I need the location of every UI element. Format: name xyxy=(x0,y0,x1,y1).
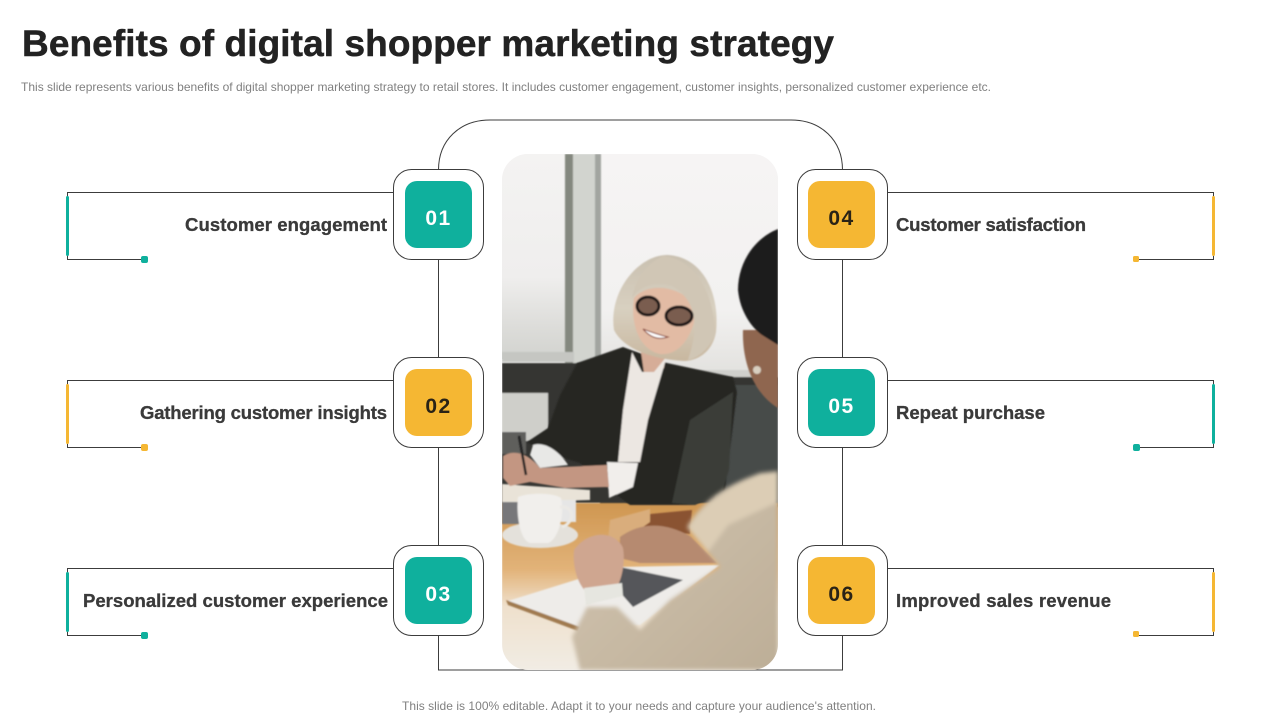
item 02: gathering customer insights xyxy=(66,358,484,451)
item 01: customer engagement xyxy=(66,170,484,263)
item 05: repeat purchase xyxy=(798,358,1215,451)
badge 02: 02 xyxy=(425,395,452,418)
badge 05: 05 xyxy=(828,395,855,418)
notebook and writing hand xyxy=(502,484,590,502)
badge 05 xyxy=(798,358,888,448)
label 05: Repeat purchase xyxy=(896,402,1045,423)
dot 06 xyxy=(1133,631,1139,637)
subtitle description: This slide represents various benefits of digital shopper marketing strategy to retail stores. It includes customer engagement, customer insights, personalized customer experience etc. xyxy=(21,80,991,94)
jacket xyxy=(527,347,737,505)
blouse xyxy=(618,352,667,462)
dot 03 xyxy=(141,632,148,639)
badge 04: 04 xyxy=(828,207,855,230)
accent bar 03 xyxy=(66,572,69,632)
hair xyxy=(613,255,717,361)
badge 02 xyxy=(394,358,484,448)
photo: two women meeting at a table xyxy=(502,154,778,670)
item 04: customer satisfaction xyxy=(798,170,1215,262)
paper and tablet xyxy=(508,565,720,628)
neck xyxy=(640,352,666,373)
dot 01 xyxy=(141,256,148,263)
neck and ear xyxy=(743,330,778,408)
dot 05 xyxy=(1133,444,1140,451)
label 03: Personalized customer experience xyxy=(83,590,388,611)
table xyxy=(502,503,778,670)
badge 06: 06 xyxy=(828,583,855,606)
smile xyxy=(643,329,668,338)
badge 04 xyxy=(798,170,888,260)
dot 02 xyxy=(141,444,148,451)
footer note: This slide is 100% editable. Adapt it to your needs and capture your audience's attention. xyxy=(402,699,876,713)
bracket 05 xyxy=(888,380,1214,448)
label 04: Customer satisfaction xyxy=(896,214,1086,235)
accent bar 06 xyxy=(1212,572,1215,632)
bracket 03 xyxy=(68,568,393,636)
accent bar 04 xyxy=(1212,196,1215,256)
accent bar 02 xyxy=(66,384,69,444)
label 01: Customer engagement xyxy=(185,214,387,235)
bracket 01 xyxy=(68,192,393,260)
bracket 06 xyxy=(888,568,1214,636)
foreground hands xyxy=(620,526,717,563)
papers left of cup xyxy=(502,502,519,524)
glasses xyxy=(637,297,692,325)
badge 01: 01 xyxy=(425,207,452,230)
dot 04 xyxy=(1133,256,1139,262)
coffee cup and saucer xyxy=(502,522,578,548)
item 03: personalized customer experience xyxy=(66,546,484,639)
item 06: improved sales revenue xyxy=(798,546,1215,637)
label 02: Gathering customer insights xyxy=(140,402,387,423)
accent bar 05 xyxy=(1212,384,1215,444)
face xyxy=(633,288,697,354)
bracket 02 xyxy=(68,380,393,448)
bracket 04 xyxy=(888,192,1214,260)
badge 03: 03 xyxy=(425,583,452,606)
dark hair xyxy=(738,229,778,345)
accent bar 01 xyxy=(66,196,69,256)
foreground person xyxy=(572,471,778,670)
wallet and envelope xyxy=(640,510,692,534)
badge 03 xyxy=(394,546,484,636)
central connector frame xyxy=(438,120,842,670)
badge 01 xyxy=(394,170,484,260)
title: Benefits of digital shopper marketing strategy xyxy=(22,23,834,64)
badge 06 xyxy=(798,546,888,636)
label 06: Improved sales revenue xyxy=(896,590,1111,611)
